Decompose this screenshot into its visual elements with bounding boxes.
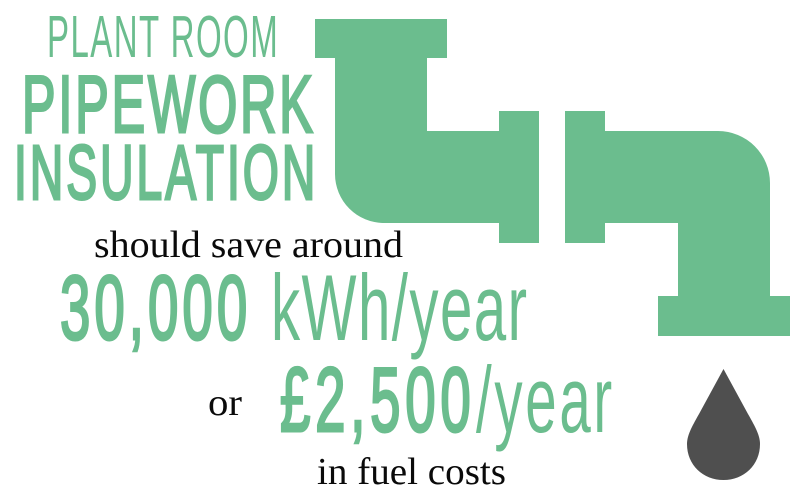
- right pipe section: [565, 111, 790, 336]
- text: should save around: should save around: [94, 224, 403, 266]
- stat: cost saving value: £2,500: [280, 349, 471, 450]
- left pipe section: [315, 19, 539, 243]
- stat: energy saving value: 30,000: [60, 257, 247, 358]
- text: in fuel costs: in fuel costs: [317, 451, 506, 493]
- text: or: or: [208, 382, 242, 424]
- title line: pipework: PIPEWORK: [22, 60, 313, 150]
- icon: water drop: [687, 369, 760, 480]
- title line: insulation: INSULATION: [14, 131, 315, 216]
- stat: energy saving unit: kWh/year: [271, 255, 527, 360]
- title: [14, 5, 315, 216]
- stat: cost saving unit: /year: [476, 348, 612, 453]
- title line: plant room: PLANT ROOM: [47, 5, 278, 71]
- icon: broken pipe: [315, 19, 790, 336]
